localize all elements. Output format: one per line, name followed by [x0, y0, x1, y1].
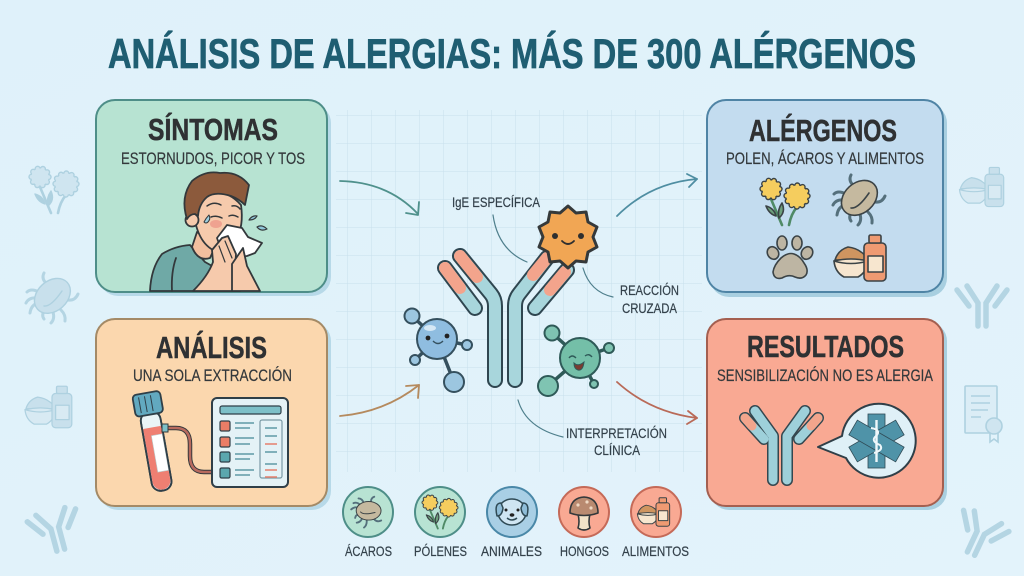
panel: síntomas [96, 100, 331, 296]
heading: resultados: RESULTADOS [747, 329, 904, 364]
leader lines [493, 215, 613, 437]
label: interpretación clínica [566, 425, 667, 458]
icon: lab report [212, 398, 288, 487]
panel: alérgenos [707, 100, 947, 297]
panel: resultados [707, 319, 947, 510]
icon: small antibody [745, 411, 818, 480]
label: reacción cruzada [620, 282, 679, 316]
label: reacción cruzada: REACCIÓN [620, 282, 679, 298]
label: IgE específica: IgE ESPECÍFICA [452, 194, 541, 210]
label: interpretación clínica: INTERPRETACIÓN [566, 425, 667, 441]
legend: alimentos: ALIMENTOS [622, 543, 689, 559]
arrow: síntomas to center [340, 181, 419, 215]
legend: animales: ANIMALES [481, 543, 542, 559]
arrow: center to alérgenos [617, 174, 697, 216]
legend: ácaros: ÁCAROS [345, 543, 392, 559]
label: reacción cruzada: CRUZADA [622, 300, 678, 316]
icon: food and bottle [834, 235, 886, 281]
central antibody [445, 256, 567, 380]
blue molecule [404, 308, 472, 392]
legend: animales [481, 487, 542, 559]
legend: ácaros [343, 487, 393, 559]
icon: paw [765, 236, 815, 278]
text: síntomas subtitle: ESTORNUDOS, PICOR Y TOS [121, 149, 305, 168]
icon: blood tube [132, 391, 177, 493]
arrow: center to resultados [617, 382, 697, 424]
allergen star [539, 206, 597, 268]
icon: tube connecting hose [162, 424, 213, 472]
green molecule [538, 326, 614, 396]
text: análisis subtitle: UNA SOLA EXTRACCIÓN [133, 366, 292, 385]
icon: flowers [762, 180, 808, 225]
heading: análisis: ANÁLISIS [156, 330, 267, 365]
heading: síntomas: SÍNTOMAS [148, 112, 278, 147]
legend: hongos [559, 487, 609, 559]
heading: alérgenos: ALÉRGENOS [749, 113, 897, 148]
icon: mite [833, 173, 885, 225]
faint decorative icons [25, 167, 1011, 564]
panel: análisis [96, 319, 331, 510]
legend: pólenes: PÓLENES [414, 543, 467, 559]
label: interpretación clínica: CLÍNICA [594, 442, 641, 458]
text: alérgenos subtitle: POLEN, ÁCAROS Y ALIMENTOS [726, 149, 924, 168]
legend: hongos: HONGOS [560, 543, 609, 559]
icon: speech bubble with medical star [818, 404, 916, 478]
legend: alimentos [622, 487, 689, 559]
icon: sneezing man [150, 172, 267, 291]
arrow: análisis to center [340, 385, 419, 416]
legend: pólenes [414, 487, 467, 559]
text: resultados subtitle: SENSIBILIZACIÓN NO ES ALERGIA [717, 366, 934, 385]
